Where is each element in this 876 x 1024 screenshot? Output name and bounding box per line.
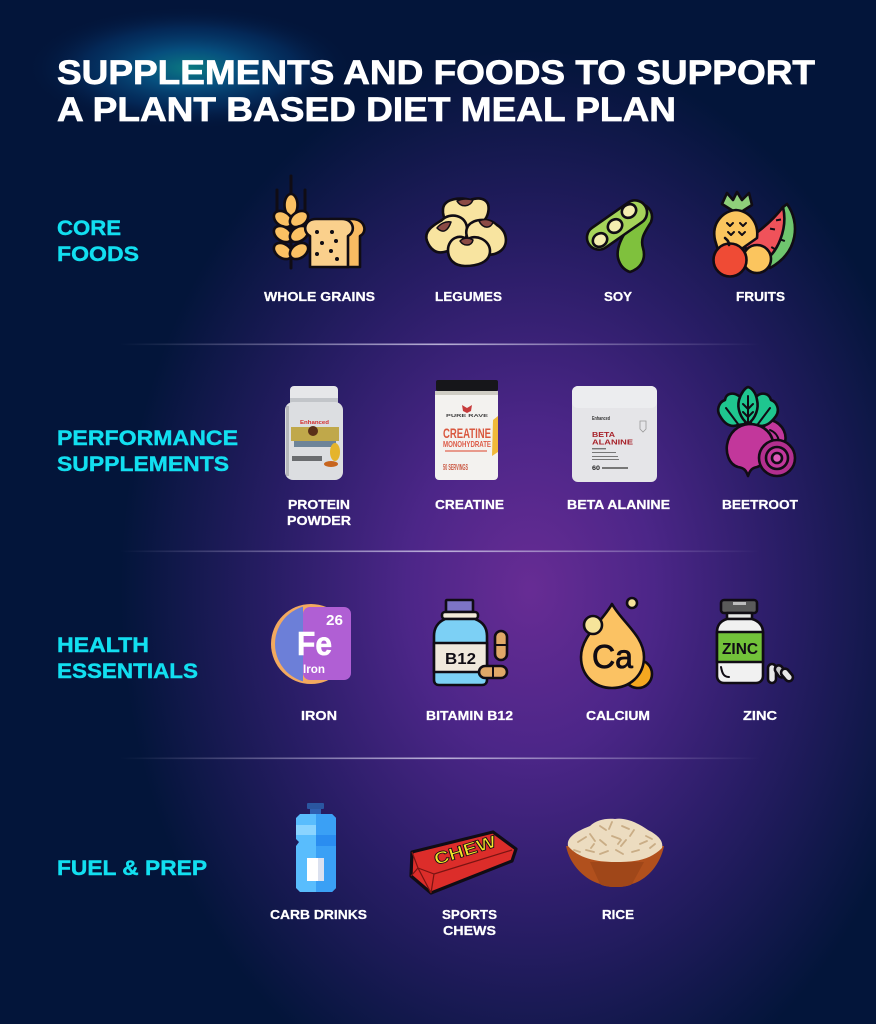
icon: fruits <box>714 192 795 276</box>
label: whole grains: WHOLE GRAINS <box>264 289 375 304</box>
title: SUPPLEMENTS AND FOODS TO SUPPORT <box>57 54 815 92</box>
label: sports chews: CHEWS <box>443 923 496 938</box>
icon: legumes <box>426 199 506 266</box>
category heading: core foods <box>57 217 139 266</box>
category heading: health essentials: ESSENTIALS <box>57 660 198 683</box>
image: beta alanine jar: 60 <box>592 466 601 472</box>
label: sports chews <box>442 907 497 938</box>
label: sports chews: SPORTS <box>442 907 497 922</box>
label: creatine: CREATINE <box>435 497 504 512</box>
image: beta alanine jar: Enhanced <box>592 416 610 422</box>
image: creatine jar: MONOHYDRATE <box>443 439 491 449</box>
label: protein powder <box>287 497 352 528</box>
category heading: performance supplements <box>57 427 238 476</box>
icon: sports chews <box>411 832 516 893</box>
category heading: fuel and prep: FUEL & PREP <box>57 857 207 880</box>
label: protein powder: POWDER <box>287 513 352 528</box>
image: beta alanine jar: BETA <box>592 430 616 439</box>
category heading: health essentials: HEALTH <box>57 634 149 657</box>
image: beta alanine jar: ALANINE <box>592 438 633 446</box>
icon: iron <box>271 604 353 684</box>
icon: whole grains <box>271 176 364 268</box>
icon: iron: Iron <box>303 662 325 676</box>
label: beta alanine: BETA ALANINE <box>567 497 670 512</box>
title: A PLANT BASED DIET MEAL PLAN <box>57 91 676 129</box>
image: creatine jar <box>435 380 498 480</box>
category heading: performance supplements: PERFORMANCE <box>57 427 238 450</box>
icon: iron: 26 <box>326 612 343 629</box>
label: soy: SOY <box>604 289 632 304</box>
category heading: health essentials <box>57 634 198 683</box>
icon: vitamin b12 bottle: B12 <box>445 651 476 668</box>
label: iron: IRON <box>301 708 337 723</box>
label: bitamin b12: BITAMIN B12 <box>426 708 513 723</box>
category heading: core foods: FOODS <box>57 243 139 266</box>
icon: zinc bottle <box>717 600 795 683</box>
icon: vitamin b12 bottle <box>434 600 507 685</box>
icon: calcium <box>581 598 652 688</box>
label: beetroot: BEETROOT <box>722 497 798 512</box>
image: protein powder jar: Enhanced <box>300 420 329 426</box>
icon: beetroot <box>718 387 795 476</box>
icon: carb drink bottle <box>296 803 336 892</box>
icon: rice bowl <box>566 819 664 887</box>
image: protein powder jar <box>285 386 343 480</box>
label: legumes: LEGUMES <box>435 289 502 304</box>
image: creatine jar: PURE RAVE <box>446 413 488 418</box>
label: zinc: ZINC <box>743 708 778 723</box>
icon: sports chews: CHEW <box>432 832 500 869</box>
icon: calcium: Ca <box>592 638 634 675</box>
image: creatine jar: 50 SERVINGS <box>443 463 468 472</box>
label: rice: RICE <box>602 907 634 922</box>
label: calcium: CALCIUM <box>586 708 650 723</box>
icon: soy <box>582 196 652 272</box>
label: protein powder: PROTEIN <box>288 497 350 512</box>
title <box>57 54 815 129</box>
label: carb drinks: CARB DRINKS <box>270 907 367 922</box>
icon: iron: Fe <box>297 625 332 662</box>
category heading: performance supplements: SUPPLEMENTS <box>57 453 229 476</box>
icon: zinc bottle: ZINC <box>722 641 758 658</box>
label: fruits: FRUITS <box>736 289 785 304</box>
image: creatine jar: CREATINE <box>443 425 491 441</box>
image: beta alanine jar <box>572 386 657 482</box>
category heading: core foods: CORE <box>57 217 121 240</box>
